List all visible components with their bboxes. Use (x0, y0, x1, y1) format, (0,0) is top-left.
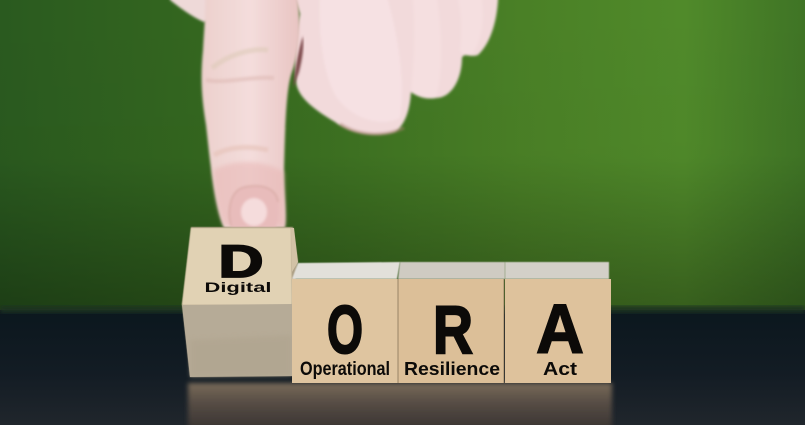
top face (292, 262, 400, 279)
label Resilience: Resilience (404, 358, 500, 379)
block A: Act (505, 262, 611, 383)
block O: Operational (292, 262, 400, 383)
front face (292, 279, 398, 383)
tilted block body (182, 227, 298, 377)
label Digital: Digital (204, 279, 272, 295)
block D: Digital (182, 227, 298, 377)
label Operational: Operational (300, 359, 390, 380)
label Act: Act (543, 358, 577, 379)
shaded face (182, 304, 292, 377)
fingertip flush (213, 162, 285, 226)
front face (398, 279, 504, 383)
top face (505, 262, 609, 279)
knuckles and folded fingers (170, 0, 498, 135)
front face (505, 279, 611, 383)
shadow between index finger and hand (293, 36, 303, 88)
reflection of blocks on the table (188, 383, 612, 425)
knuckle wrinkles (206, 50, 274, 155)
dark table surface (0, 306, 805, 425)
top face (398, 262, 505, 279)
letter R: R (433, 292, 473, 368)
lit face (182, 228, 292, 305)
letter A: A (536, 290, 584, 368)
index finger (202, 0, 299, 228)
green background (0, 0, 805, 312)
hand pressing the first block (170, 0, 498, 228)
letter D: D (218, 236, 264, 287)
block R: Resilience (398, 262, 505, 383)
letter O: O (327, 292, 363, 368)
fingernail (229, 186, 278, 228)
block seams (398, 279, 504, 383)
right edge (291, 228, 298, 272)
